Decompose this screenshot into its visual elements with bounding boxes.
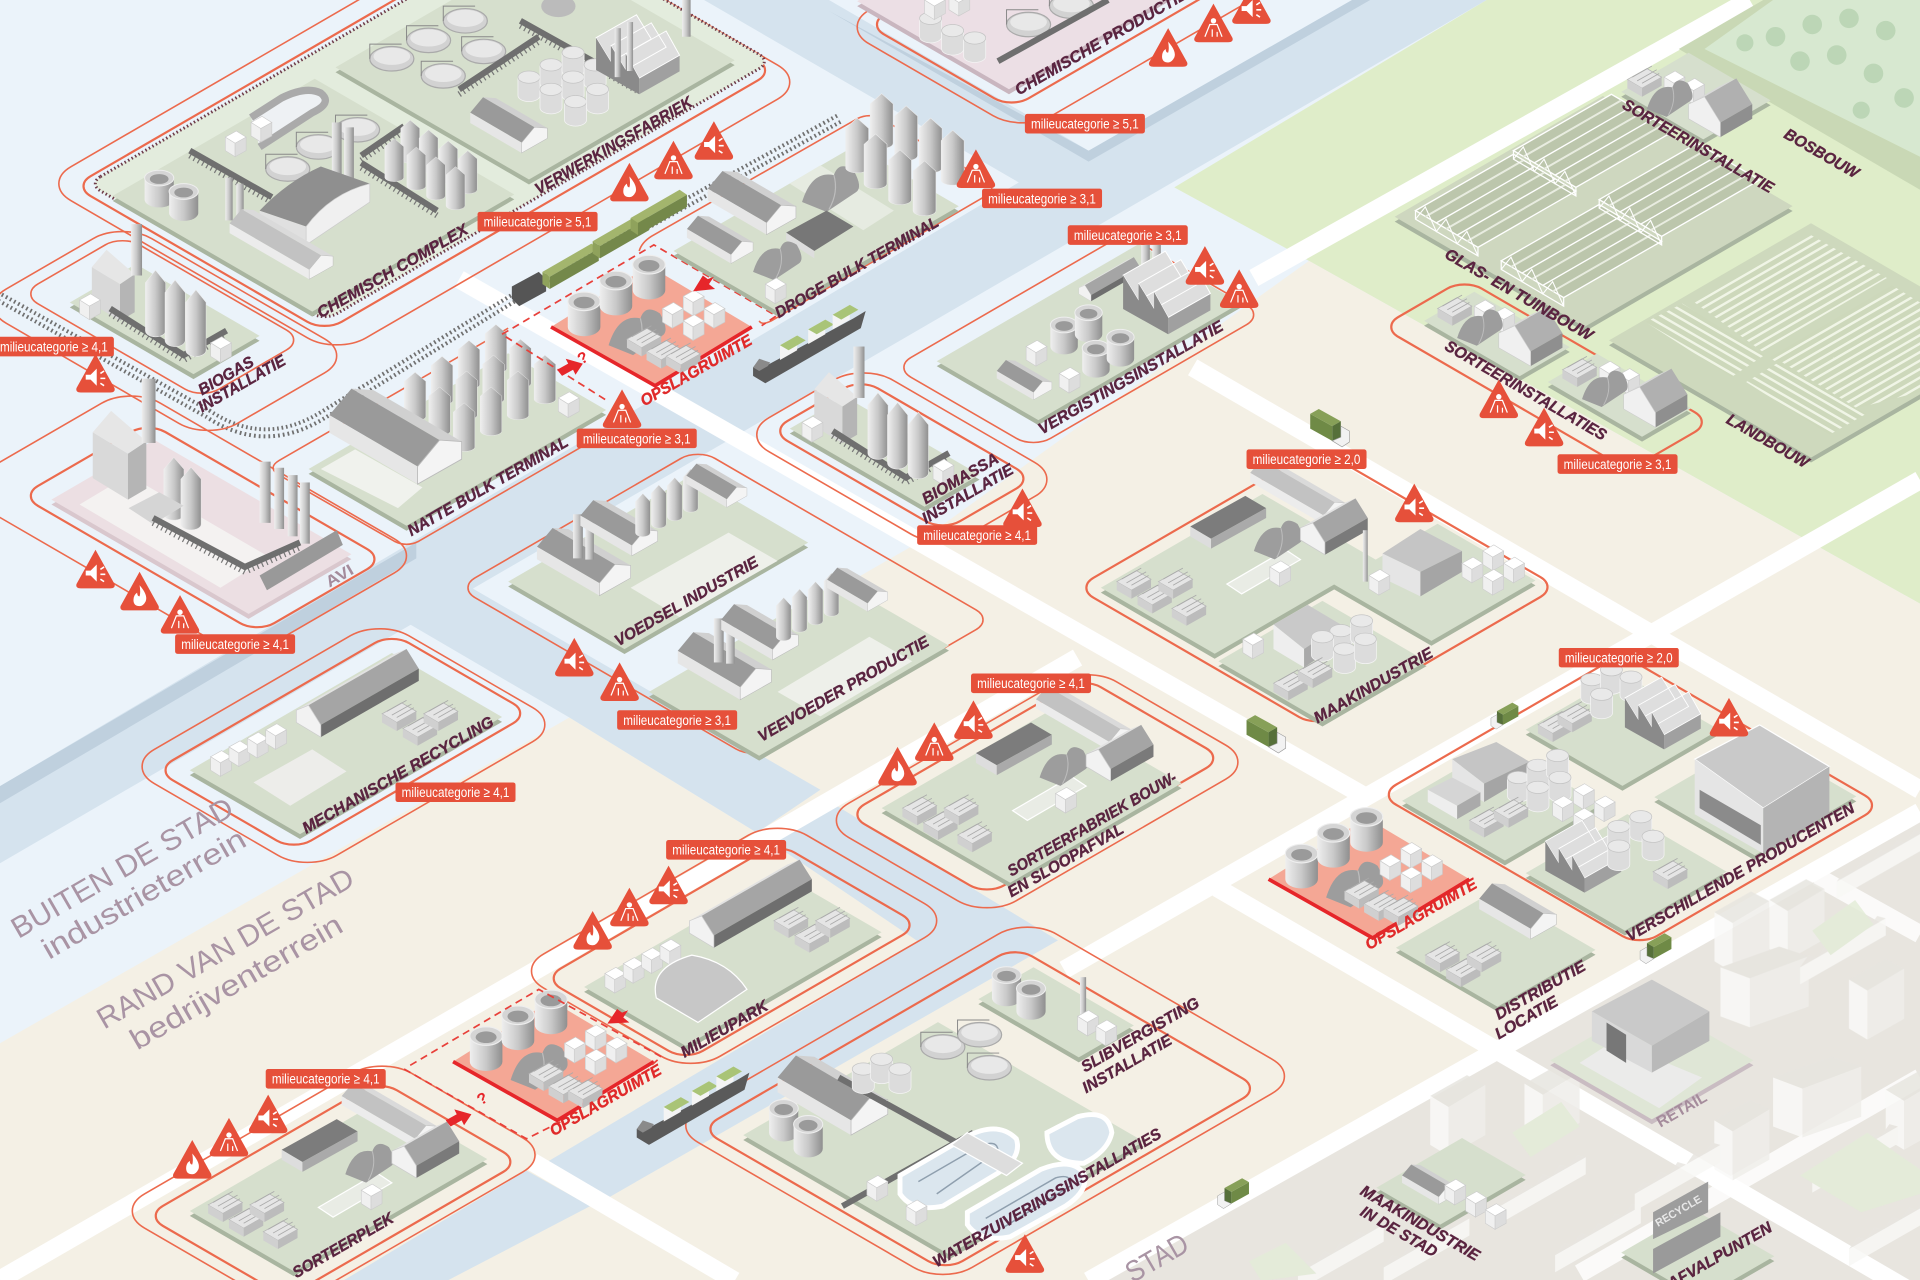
plot: sorteerinstallatie boven [1621, 53, 1771, 144]
train [512, 190, 687, 306]
tags: milieucategorie: milieucategorie ≥ 2,0 [1565, 649, 1673, 665]
tags: milieucategorie [0, 114, 1679, 1089]
beige land [0, 261, 1920, 1280]
tags: milieucategorie: milieucategorie ≥ 5,1 [484, 214, 592, 230]
tags: milieucategorie: milieucategorie ≥ 4,1 [181, 636, 289, 652]
tags: milieucategorie: milieucategorie ≥ 4,1 [0, 338, 108, 354]
tags: milieucategorie: milieucategorie ≥ 4,1 [923, 527, 1031, 543]
labels: plot names: INSTALLATIE [919, 461, 1017, 528]
labels: plot names: SORTEERFABRIEK BOUW- [1005, 769, 1180, 880]
recycle sign: RECYCLE [1653, 1193, 1704, 1230]
plot: mechanische recycling [190, 649, 502, 839]
recycle sign [1653, 1182, 1708, 1239]
green plot: landbouw [1609, 223, 1920, 462]
plot: retail [1550, 980, 1753, 1124]
water: bottom canal [343, 1171, 590, 1280]
tags: milieucategorie: milieucategorie ≥ 4,1 [672, 842, 780, 858]
labels: plot names: OPSLAGRUIMTE [547, 1062, 665, 1140]
plot: AVI [51, 379, 351, 619]
verwerkingsfabriek buildings [370, 0, 691, 153]
tags: milieucategorie: milieucategorie ≥ 3,1 [623, 712, 731, 728]
grey city land [1089, 812, 1920, 1280]
vergisting buildings [997, 245, 1210, 400]
plot: droge bulk terminal [673, 94, 964, 316]
water: main canal [0, 0, 1487, 863]
plot: milieupark [584, 860, 882, 1051]
plot: maakindustrie in de stad [1376, 1138, 1526, 1230]
labels: plot names: CHEMISCH COMPLEX [314, 221, 472, 322]
plot: chemisch complex + verwerkingsfabriek [88, 0, 771, 321]
ship 1 [753, 305, 866, 383]
plot: slibvergisting installatie [978, 967, 1134, 1062]
plot: biomassa installatie [790, 347, 980, 512]
island: chemische productie [829, 0, 1370, 162]
railway [0, 119, 839, 433]
ship 2 [637, 1067, 749, 1145]
plot: natte bulk terminal [309, 325, 606, 531]
labels: plot names: GLAS- EN TUINBOUW [1442, 246, 1597, 345]
labels: plot names: SORTEERINSTALLATIES [1442, 338, 1610, 444]
waterzuivering buildings [769, 1020, 1112, 1238]
green land [1174, 0, 1920, 604]
labels: plot names: MAAKINDUSTRIE [1357, 1183, 1483, 1265]
plot: opslagruimte 2 [404, 989, 661, 1139]
plot: vergistingsinstallatie [937, 244, 1240, 425]
big hall [260, 167, 370, 245]
labels: plot names: BIOGAS [196, 353, 257, 399]
plot: distributie locatie [1396, 883, 1596, 1012]
labels: plot names: MAAKINDUSTRIE [1311, 645, 1437, 727]
mechanische recycling buildings [211, 649, 458, 776]
tags: milieucategorie: milieucategorie ≥ 4,1 [402, 784, 510, 800]
heading: buiten de stad: industrieterrein [36, 822, 252, 966]
labels: plot names: MECHANISCHE RECYCLING [300, 714, 497, 837]
labels: plot names: VERSCHILLENDE PRODUCENTEN [1623, 800, 1858, 945]
labels: plot names: EN SLOOPAFVAL [1005, 821, 1127, 901]
labels: plot names: RETAIL [1654, 1089, 1710, 1131]
plot: veevoeder productie [649, 568, 949, 761]
labels: plot names: INSTALLATIE [1080, 1032, 1175, 1097]
labels: plot names: VERWERKINGSFABRIEK [532, 93, 697, 198]
silos natte bulk [329, 325, 579, 484]
heading: rand van de stad: RAND VAN DE STAD [91, 862, 360, 1036]
plot: afvalpunten [1621, 1182, 1774, 1280]
tags: milieucategorie: milieucategorie ≥ 3,1 [1074, 227, 1182, 243]
labels: plot names: VEEVOEDER PRODUCTIE [755, 633, 933, 746]
plot: biogas installatie [70, 224, 260, 379]
labels: plot names: INSTALLATIE [196, 352, 289, 416]
tags: milieucategorie: milieucategorie ≥ 3,1 [1564, 456, 1672, 472]
trucks [1218, 409, 1671, 1209]
tags: milieucategorie: milieucategorie ≥ 3,1 [583, 430, 691, 446]
labels: plot names: OPSLAGRUIMTE [638, 332, 756, 410]
water: side canal [410, 588, 820, 833]
labels: plot names: DROGE BULK TERMINAL [772, 214, 942, 322]
labels: plot names: SORTEERINSTALLATIE [1619, 96, 1777, 197]
labels: plot names: OPSLAGRUIMTE [1362, 876, 1481, 954]
maakindustrie factory [1363, 529, 1524, 596]
city: pale buildings [1249, 830, 1920, 1280]
water: lower canal [545, 796, 1058, 1202]
labels: plot names: VOEDSEL INDUSTRIE [612, 554, 762, 650]
tags: milieucategorie: milieucategorie ≥ 3,1 [988, 190, 1096, 206]
labels: plot names: LANDBOUW [1723, 411, 1813, 473]
labels: plot names: SORTEERPLEK [290, 1209, 398, 1280]
tags: milieucategorie: milieucategorie ≥ 2,0 [1253, 451, 1361, 467]
warning icons: person [161, 5, 1517, 1156]
plot: opslagruimte 1 [502, 245, 776, 402]
chemische productie buildings [920, 0, 1108, 62]
labels: plot names: NATTE BULK TERMINAL [405, 434, 571, 540]
plot: opslagruimte 3 [1269, 808, 1469, 938]
cluster: verschillende producenten [1402, 664, 1856, 935]
arrows and question marks [446, 276, 715, 1127]
cluster: maakindustrie [1101, 460, 1536, 726]
milieupark buildings [605, 860, 850, 1022]
raceways [900, 1115, 1112, 1238]
labels: plot names: VERGISTINGSINSTALLATIE [1036, 318, 1227, 438]
labels: plot names: WATERZUIVERINGSINSTALLATIES [930, 1125, 1165, 1271]
maakindustrie drums and pallets [1243, 605, 1376, 700]
green plot: glas- en tuinbouw [1395, 94, 1793, 332]
tags: milieucategorie: milieucategorie ≥ 4,1 [977, 675, 1085, 691]
labels: plot names: MILIEUPARK [678, 997, 773, 1061]
plot: chemische productie [857, 0, 1327, 94]
plots: sorteerinstallaties [1424, 292, 1691, 442]
labels: plot names: BIOMASSA [919, 450, 1002, 508]
labels: plot names: IN DE STAD [1357, 1203, 1440, 1261]
plot: sorteerfabriek bouw- en sloopafval [882, 686, 1182, 888]
warning icons: fire [121, 29, 1187, 1178]
retail building [1592, 980, 1709, 1073]
chemisch complex buildings [145, 90, 477, 279]
tags: milieucategorie: milieucategorie ≥ 5,1 [1031, 116, 1139, 132]
AVI buildings [93, 379, 343, 590]
droge bulk buildings [687, 94, 964, 304]
tags: milieucategorie: milieucategorie ≥ 4,1 [272, 1071, 380, 1087]
labels: plot names: DISTRIBUTIE [1492, 958, 1589, 1023]
labels: plot names: AVI [323, 562, 357, 591]
arrows and question marks: ? [474, 1090, 491, 1109]
plot: sorteerplek [190, 1083, 487, 1276]
labels: plot names: SLIBVERGISTING [1078, 995, 1202, 1076]
arrows and question marks: ? [575, 349, 592, 368]
plot: waterzuiveringsinstallaties [743, 1020, 1144, 1259]
forest [1679, 0, 1920, 190]
heading: buiten de stad: BUITEN DE STAD [5, 791, 239, 945]
plot: voedsel industrie [508, 464, 808, 654]
heading: rand van de stad: bedrijventerrein [124, 908, 348, 1057]
water: canal darker bank [0, 542, 416, 803]
producenten buildings [1428, 664, 1829, 893]
labels: plot names: LOCATIE [1492, 993, 1562, 1043]
labels: plot names: BOSBOUW [1781, 126, 1863, 183]
